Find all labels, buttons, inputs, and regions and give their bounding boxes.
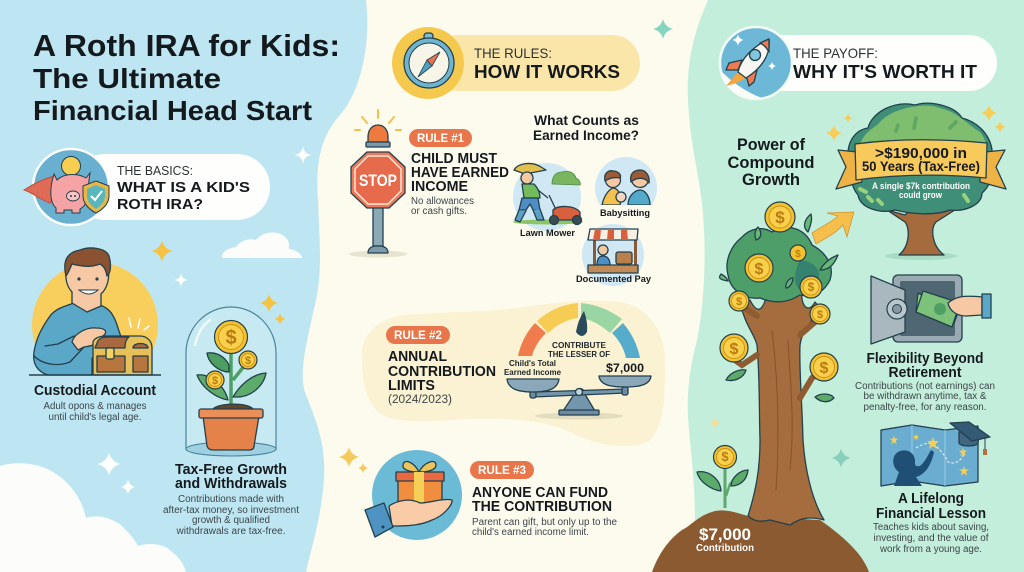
tax-free growth text: Contributions made with — [178, 494, 284, 505]
lifelong lesson text: Financial Lesson — [876, 506, 986, 522]
rule 1 badge — [409, 129, 472, 147]
big money tree with banner: could grow — [899, 190, 943, 200]
rule 2 text — [388, 349, 496, 406]
rule 1 text: INCOME — [411, 179, 468, 195]
power of compound growth heading: Growth — [742, 171, 800, 189]
lifelong lesson text: Teaches kids about saving, — [873, 522, 989, 533]
flexibility text — [855, 351, 995, 413]
growing coin tree — [720, 202, 838, 525]
tax-free growth text: growth & qualified — [192, 515, 270, 526]
title: The Ultimate — [33, 63, 221, 94]
brown soil hill — [652, 510, 869, 572]
seed contribution label: $7,000 — [699, 525, 751, 544]
rule 1 text: CHILD MUST — [411, 151, 497, 167]
gauge: Earned Income — [504, 368, 562, 377]
background cloud bottom left — [0, 463, 186, 572]
gauge: $7,000 — [606, 361, 644, 375]
rule 3 text: Parent can gift, but only up to the — [472, 517, 617, 528]
rule 2 badge — [386, 326, 450, 344]
seedling with coin — [697, 446, 748, 508]
panel: the rules — [339, 19, 673, 540]
rule 3 text: child's earned income limit. — [472, 527, 589, 538]
tree coins: $ — [755, 261, 764, 278]
icon: piggy bank with cape and shield — [24, 149, 109, 225]
flexibility text: Retirement — [888, 365, 962, 381]
section heading: the basics: ROTH IRA? — [117, 197, 203, 213]
power of compound growth heading — [728, 136, 814, 189]
rule 2 panel — [362, 301, 665, 446]
section heading: the payoff: WHY IT'S WORTH IT — [793, 62, 977, 82]
icon: stop sign with alarm light: STOP — [359, 172, 397, 190]
rule 2 background blob — [362, 301, 665, 446]
section heading: the basics: WHAT IS A KID'S — [117, 180, 250, 196]
rule 1 text — [411, 151, 509, 217]
seed contribution label — [696, 525, 754, 554]
tree coins: $ — [795, 249, 801, 260]
section heading: the basics — [72, 154, 270, 220]
tree coins: $ — [736, 296, 742, 308]
section heading: the payoff: THE PAYOFF: — [793, 45, 878, 61]
sparkle — [653, 19, 673, 39]
lifelong lesson text — [873, 491, 989, 555]
flexibility text: penalty-free, for any reason. — [864, 402, 986, 413]
background: payoff mint panel — [688, 0, 1024, 572]
custodial account text — [34, 383, 156, 423]
power of compound growth heading: Compound — [728, 154, 814, 172]
rule 2 text: (2024/2023) — [388, 394, 452, 406]
tree coins: $ — [817, 309, 823, 321]
tree coins: $ — [808, 280, 815, 294]
rule 1 — [349, 110, 509, 258]
tree coins: $ — [730, 341, 739, 358]
label: babysitting: Babysitting — [600, 208, 650, 219]
seedling with coin: $ — [721, 449, 729, 464]
babysitting illustration — [595, 157, 657, 205]
rule 2 badge: RULE #2 — [394, 330, 442, 342]
tree coins: $ — [775, 208, 785, 227]
label: documented pay: Documented Pay — [576, 274, 652, 285]
rule 3 text: THE CONTRIBUTION — [472, 499, 612, 515]
panel: the payoff — [652, 27, 1006, 572]
subheading: What Counts as — [534, 112, 639, 128]
rule 3 badge: RULE #3 — [478, 465, 526, 477]
big money tree with banner: A single $7k contribution — [872, 181, 970, 191]
section heading: the basics: THE BASICS: — [117, 164, 193, 178]
title — [33, 28, 340, 126]
balance scale — [507, 376, 651, 420]
rule 3 badge — [470, 461, 534, 479]
big money tree with banner — [836, 103, 1006, 260]
glass dome plant illustration: $ — [225, 327, 237, 349]
lifelong lesson text: work from a young age. — [879, 544, 982, 555]
glass dome plant illustration — [186, 307, 276, 456]
documented pay stand illustration — [582, 224, 644, 286]
tree coins — [720, 202, 838, 381]
section heading: the rules: THE RULES: — [474, 45, 552, 61]
label: lawn mower: Lawn Mower — [520, 228, 575, 239]
growth arrow — [812, 212, 854, 244]
big money tree with banner: 50 Years (Tax-Free) — [862, 158, 980, 174]
subheading: Earned Income? — [533, 127, 639, 143]
sparkles — [710, 105, 1006, 468]
custodial account text: until child's legal age. — [48, 412, 142, 423]
rule 1 text: or cash gifts. — [411, 206, 467, 217]
glass dome plant illustration: $ — [245, 355, 251, 367]
section heading: the rules: HOW IT WORKS — [474, 62, 620, 82]
icon: stop sign with alarm light — [349, 110, 407, 258]
icon: rocket — [720, 27, 792, 99]
rule 1 badge: RULE #1 — [417, 133, 465, 145]
custodial account illustration — [29, 248, 161, 388]
seed contribution label: Contribution — [696, 543, 754, 554]
treasure chest — [93, 336, 152, 375]
canopy — [727, 228, 831, 302]
lifelong lesson text: A Lifelong — [898, 491, 964, 507]
flexibility text: be withdrawn anytime, tax & — [864, 391, 987, 402]
man shirt — [34, 303, 122, 375]
sparkles — [339, 447, 368, 473]
tax-free growth text: withdrawals are tax-free. — [175, 526, 286, 537]
tax-free growth text: after-tax money, so investment — [163, 505, 299, 516]
gauge: THE LESSER OF — [548, 350, 610, 359]
section heading: the payoff — [740, 35, 997, 91]
tax-free growth text — [163, 462, 299, 537]
lifelong lesson: map illustration — [881, 422, 990, 486]
rule 2 text: LIMITS — [388, 378, 435, 394]
plant stem and leaves — [231, 345, 245, 408]
flexibility: safe illustration — [871, 275, 991, 344]
rule 1 text: No allowances — [411, 196, 474, 207]
what counts as earned income — [513, 112, 657, 286]
icon: hand holding gift — [365, 450, 462, 540]
big money tree with banner: >$190,000 in — [875, 146, 967, 162]
tax-free growth text: and Withdrawals — [175, 476, 287, 492]
rule 3 text — [472, 485, 617, 538]
tree coins: $ — [820, 360, 829, 377]
subheading — [533, 112, 639, 143]
custodial account text: Adult opons & manages — [44, 401, 146, 412]
power of compound growth heading: Power of — [737, 136, 805, 154]
rule 3 text: ANYONE CAN FUND — [472, 485, 608, 501]
gauge: CONTRIBUTE — [552, 341, 607, 350]
title: Financial Head Start — [33, 95, 312, 126]
sparkles left panel — [98, 146, 312, 494]
cloud top left — [222, 232, 302, 258]
background: basics blue panel — [0, 0, 367, 572]
title: A Roth IRA for Kids: — [33, 28, 340, 63]
section heading: the rules — [430, 35, 640, 91]
lawn mower illustration — [513, 163, 583, 231]
custodial account text: Custodial Account — [34, 383, 156, 399]
flexibility text: Flexibility Beyond — [866, 351, 984, 367]
icon: compass — [392, 27, 464, 99]
tax-free growth text: Tax-Free Growth — [175, 462, 287, 478]
flexibility text: Contributions (not earnings) can — [855, 381, 995, 392]
lifelong lesson text: investing, and the value of — [874, 533, 989, 544]
rule 1 text: HAVE EARNED — [411, 165, 509, 181]
gauge: Child's Total — [509, 359, 556, 368]
rule 2 text: CONTRIBUTION — [388, 364, 496, 380]
rule 2 text: ANNUAL — [388, 349, 447, 365]
panel: the basics — [24, 149, 270, 225]
gauge — [504, 303, 644, 377]
man head — [66, 258, 109, 312]
rule 3 — [339, 447, 617, 540]
glass dome plant illustration: $ — [212, 375, 218, 387]
